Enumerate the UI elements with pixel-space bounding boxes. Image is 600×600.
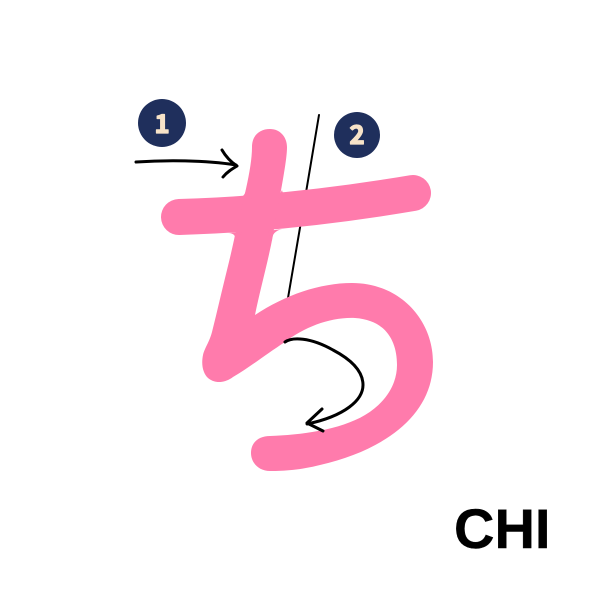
guide line: second stroke direction bbox=[288, 115, 319, 298]
badge: step 2: 2 bbox=[349, 115, 365, 152]
badge: step 1: 1 bbox=[154, 104, 170, 141]
badge: step 2 bbox=[334, 112, 380, 158]
arrow: second stroke curve bbox=[285, 339, 363, 431]
badge: step 1 bbox=[138, 99, 186, 147]
character: pink chi bbox=[179, 129, 433, 471]
label: CHI: CHI bbox=[454, 497, 550, 560]
arrow: first stroke direction bbox=[136, 150, 237, 177]
